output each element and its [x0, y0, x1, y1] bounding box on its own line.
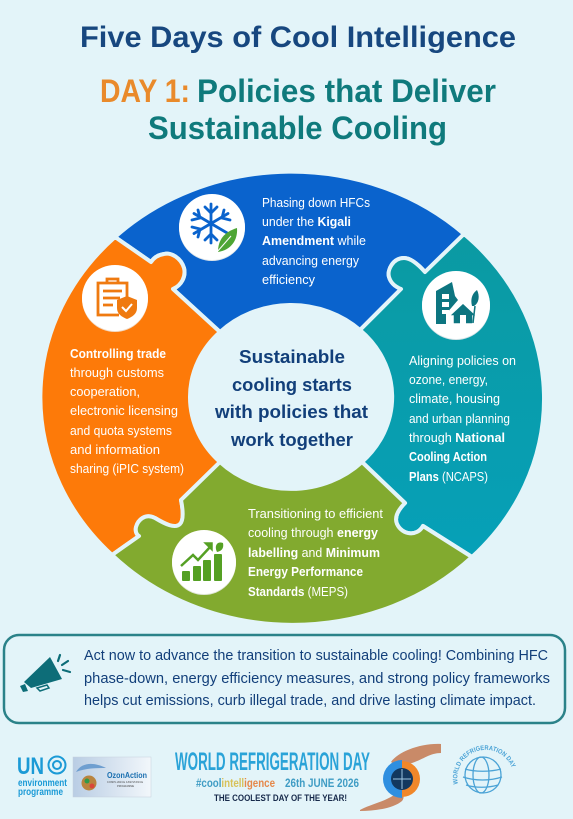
text: national plans: Cooling Action	[409, 449, 487, 464]
orange puzzle shape	[40, 237, 220, 555]
icon: megaphone	[20, 655, 70, 692]
text: trade	[70, 346, 184, 476]
heading: day 1: Policies that Deliver	[197, 73, 496, 109]
text: national plans: Plans (NCAPS)	[409, 469, 488, 484]
logo: World Refrigeration Day: THE COOLEST DAY OF THE YEAR!	[214, 793, 347, 803]
text: Kigali: efficiency	[262, 272, 315, 287]
text: labelling: cooling through energy	[248, 525, 379, 540]
logo: UN environment programme: programme	[18, 787, 63, 798]
text: labelling: Standards (MEPS)	[248, 584, 348, 599]
center message: with policies that	[214, 401, 368, 422]
logo: OzonAction: OzonAction	[107, 771, 147, 780]
panel: green segment, labelling	[112, 462, 472, 625]
arc text	[457, 750, 513, 784]
text: national plans: through National	[409, 430, 505, 445]
icon: UN emblem	[48, 756, 66, 774]
text: trade: electronic licensing	[70, 403, 178, 418]
heading: day 1	[100, 73, 496, 146]
text: national plans: and urban planning	[409, 411, 510, 426]
text: Kigali	[262, 195, 370, 287]
center message: cooling starts	[232, 374, 352, 395]
text: national plans: ozone, energy,	[409, 372, 488, 387]
text: trade: Controlling trade	[70, 346, 166, 361]
center message: work together	[230, 429, 353, 450]
icon: rising chart	[172, 530, 236, 595]
callout text: Act now to advance the transition to sustainable cooling! Combining HFC	[84, 647, 548, 664]
icon: buildings and house	[422, 271, 490, 340]
center message: Sustainable	[239, 346, 345, 367]
logo: UN environment programme: UN	[17, 753, 44, 780]
blue puzzle shape	[115, 172, 464, 332]
logo: OzonAction	[73, 757, 151, 797]
text: trade: and information	[70, 442, 160, 457]
text: labelling	[248, 506, 383, 599]
text: trade: cooperation,	[70, 384, 140, 399]
callout box	[4, 635, 565, 723]
text: labelling: labelling and Minimum	[248, 545, 380, 560]
text: national plans	[409, 353, 516, 484]
callout text	[84, 647, 550, 709]
panel: blue segment, Kigali	[115, 172, 464, 332]
text: Kigali: advancing energy	[262, 253, 359, 268]
title: Five Days of Cool Intelligence	[80, 21, 516, 54]
logo: World Refrigeration Day	[175, 748, 370, 803]
text: labelling: Energy Performance	[248, 564, 363, 579]
icon: snowflake and leaf	[179, 194, 245, 261]
logo: UN environment programme	[17, 753, 68, 798]
callout text: phase-down, energy efficiency measures, and strong policy frameworks	[84, 670, 550, 687]
text: trade: sharing (iPIC system)	[70, 461, 184, 476]
text: labelling: Transitioning to efficient	[248, 506, 383, 521]
logo: World Refrigeration Day: #coolintelligence	[196, 776, 275, 790]
logo: World Refrigeration Day: 26th JUNE 2026	[285, 776, 359, 790]
panel: orange segment, trade	[40, 237, 220, 555]
panel: teal segment, national plans	[360, 234, 544, 557]
callout	[4, 635, 565, 723]
text: trade: through customs	[70, 365, 164, 380]
text: Kigali: Phasing down HFCs	[262, 195, 370, 210]
text: Kigali: under the Kigali	[262, 214, 351, 229]
green puzzle shape	[112, 462, 472, 625]
logo: UN environment programme: environment	[18, 778, 68, 789]
heading: day 1: Sustainable Cooling	[148, 110, 447, 146]
text: trade: and quota systems	[70, 423, 172, 438]
icon: hands holding globe	[360, 744, 441, 811]
icon: clipboard and shield	[82, 265, 148, 332]
center message	[214, 346, 368, 450]
heading: day 1: DAY 1:	[100, 73, 190, 109]
logo: World Refrigeration Day: WORLD REFRIGERATION DAY	[175, 748, 370, 776]
text: national plans: climate, housing	[409, 391, 500, 406]
logo: OzonAction: COMPLIANCE ASSISTANCE	[107, 781, 143, 784]
text: Kigali: Amendment while	[262, 233, 366, 248]
callout text: helps cut emissions, curb illegal trade, and drive lasting climate impact.	[84, 692, 536, 709]
logo: globe badge: WORLD REFRIGERATION DAY	[452, 745, 516, 785]
text: national plans: Aligning policies on	[409, 353, 516, 368]
logo: OzonAction: PROGRAMME	[117, 785, 134, 788]
